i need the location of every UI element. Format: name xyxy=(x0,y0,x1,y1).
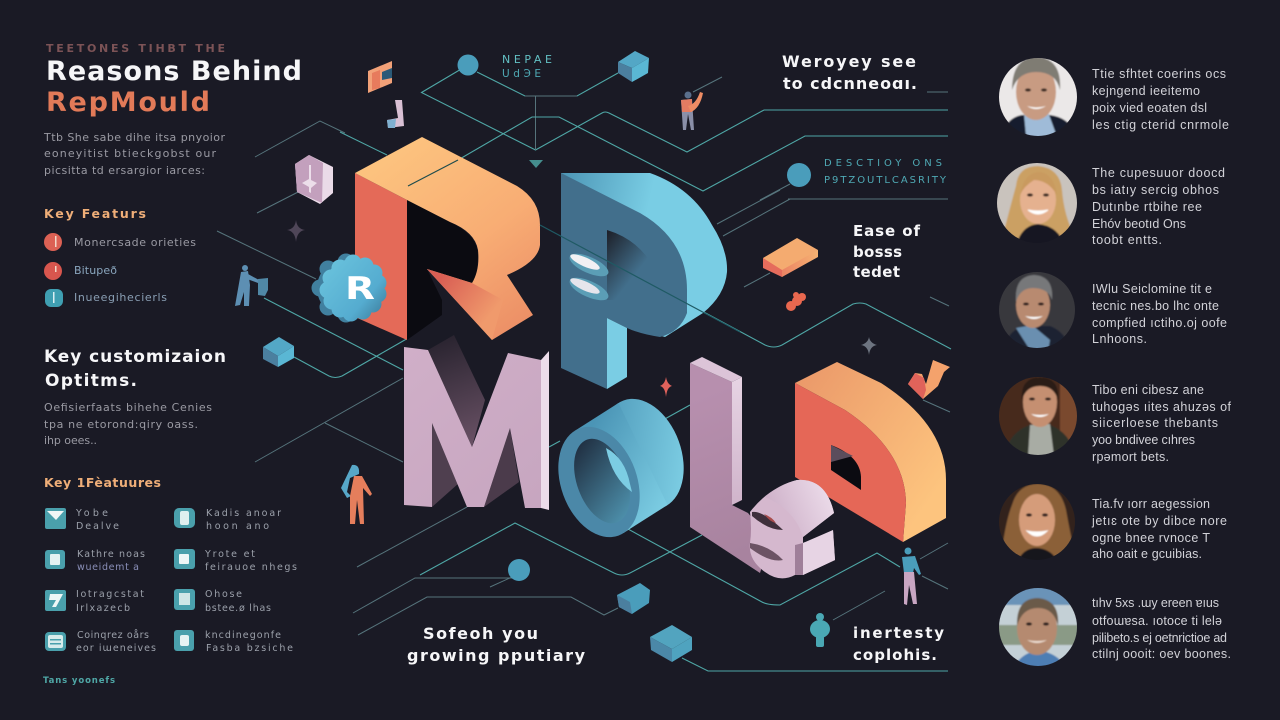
quote four: yoo bndivee cıhres xyxy=(1092,433,1195,447)
label teal right: P9TZOUTLCASRITY xyxy=(824,175,947,186)
arrow marker xyxy=(529,160,543,168)
grid item 8: Fasba bzsiche xyxy=(206,643,293,654)
quote four xyxy=(1092,383,1232,464)
feature item three xyxy=(45,289,167,307)
callout ease of xyxy=(853,222,920,281)
callout bottom right: inertesty xyxy=(853,624,944,642)
portrait man grey hair xyxy=(999,58,1077,136)
M front face xyxy=(404,347,541,508)
quote five xyxy=(1091,497,1227,561)
letter R xyxy=(355,137,540,340)
silhouette xyxy=(750,480,835,578)
D front face xyxy=(795,383,906,542)
small pipe figure xyxy=(387,100,404,128)
figure top centre xyxy=(681,92,703,130)
teal bulb icon xyxy=(810,613,830,647)
heading customization: Key customizaion xyxy=(44,347,226,367)
O back and body xyxy=(574,387,698,533)
intro paragraph: Ttb She sabe dihe itsa pnyoior xyxy=(43,131,225,144)
s counter xyxy=(750,543,783,560)
quote six: pilibeto.s ej oetnrictioe ad xyxy=(1092,631,1227,645)
network lines behind lettering xyxy=(217,65,951,671)
O front ring xyxy=(544,415,654,549)
portrait woman blond xyxy=(997,163,1077,239)
grid item 4: Yrote et xyxy=(204,549,255,560)
testimonial five xyxy=(999,484,1226,560)
grid item 3: Kathre noas xyxy=(77,549,145,560)
D top face xyxy=(795,362,946,542)
grid item 1 xyxy=(45,508,119,532)
callout top right: Weroyey see xyxy=(782,52,916,71)
orange figure xyxy=(341,465,372,524)
quote six: ctilnj oooit: oev boones. xyxy=(1092,647,1231,661)
M dark inner faces xyxy=(428,335,519,507)
quote two: Dutınbe rtbihe ree xyxy=(1092,200,1202,214)
feature item two xyxy=(44,262,117,280)
cube left xyxy=(263,337,294,367)
portrait man dark jacket xyxy=(999,272,1075,348)
left column xyxy=(43,42,302,686)
heading customization xyxy=(44,347,226,391)
callout ease of: Ease of xyxy=(853,222,920,240)
quote one: poix vied eoaten dsl xyxy=(1092,101,1207,115)
block front xyxy=(803,530,835,575)
quote one: Ttie sfhtet coerins ocs xyxy=(1092,67,1226,81)
R counter xyxy=(407,200,478,340)
quote one: kejngend ieeitemo xyxy=(1092,84,1200,98)
e counter xyxy=(752,512,783,530)
M side face xyxy=(541,351,549,510)
figure bottom right xyxy=(902,548,921,605)
quote five: aho oait e gcuibias. xyxy=(1092,547,1202,561)
feature list xyxy=(44,233,196,307)
eyebrow: TEETONES TIHBT THE xyxy=(46,42,225,55)
cube bottom xyxy=(650,625,692,662)
badge front xyxy=(320,254,386,322)
R fold xyxy=(427,269,503,340)
grid item 1: Yobe xyxy=(75,508,108,519)
testimonial two xyxy=(995,160,1225,247)
block notch xyxy=(805,521,833,545)
intro paragraph xyxy=(43,131,225,177)
quote four: rpəmort bets. xyxy=(1092,450,1169,464)
grid item 2: hoon ano xyxy=(206,521,269,532)
heading customization: Optitms. xyxy=(45,371,137,391)
callout bottom centre xyxy=(407,624,586,665)
quote three: IWlu Seiclomine tit e xyxy=(1092,282,1212,296)
heading key features two: Key 1Fèatuures xyxy=(44,475,161,490)
orange blob icon xyxy=(786,292,806,311)
quote three xyxy=(1092,282,1227,346)
portrait woman brown hair xyxy=(999,484,1075,560)
callout ease of: tedet xyxy=(853,263,900,281)
intro paragraph: picsitta td ersargior iarces: xyxy=(44,164,205,177)
feature item one: Monercsade orieties xyxy=(74,236,196,249)
P front face xyxy=(561,173,687,389)
grid item 6: bstee.ø lhas xyxy=(205,603,271,614)
block side xyxy=(795,543,803,575)
callout top right: to cdcnneoɑı. xyxy=(783,74,917,93)
main title: Reasons Behind xyxy=(46,56,302,87)
e body xyxy=(765,480,834,537)
footer note: Tans yoonefs xyxy=(43,676,115,686)
grid item 4 xyxy=(174,549,297,573)
quote four: Tibo eni cibesz ane xyxy=(1092,383,1204,397)
badge back xyxy=(312,254,375,322)
quote four: tuhogəs ıites ahuzəs of xyxy=(1092,400,1232,414)
testimonials column xyxy=(995,55,1232,670)
badge letter: R xyxy=(345,271,375,307)
grid item 7: eor iɯeneives xyxy=(76,643,156,654)
grid item 6 xyxy=(174,589,271,614)
quote five: ogne bnee rvnoce T xyxy=(1092,531,1210,545)
customization paragraph: tpa ne etorond:qiry oass. xyxy=(44,418,198,431)
grid item 1: Dealve xyxy=(76,521,119,532)
centre callouts xyxy=(407,52,947,665)
callout bottom centre: growing pputiary xyxy=(407,646,586,665)
grid item 2: Kadis anoar xyxy=(206,508,281,519)
heading key features: Key Featurs xyxy=(44,206,146,221)
grid item 3: wueidemt a xyxy=(77,562,139,573)
label top xyxy=(502,53,552,80)
P top face xyxy=(561,173,727,337)
grid item 6: Ohose xyxy=(205,589,242,600)
circle node right xyxy=(787,163,811,187)
label teal right: DESCTIOY ONS xyxy=(824,158,942,169)
testimonial six xyxy=(999,588,1230,666)
grid item 3 xyxy=(45,549,145,573)
D hole xyxy=(831,445,861,490)
star left xyxy=(287,220,305,242)
letter D xyxy=(795,362,946,542)
grid item 8 xyxy=(174,630,293,654)
L front xyxy=(690,363,770,573)
grid item 7 xyxy=(45,630,156,654)
O hole xyxy=(563,431,641,531)
title accent: RepMould xyxy=(46,87,210,118)
cylinder box bottom xyxy=(617,583,650,614)
customization paragraph xyxy=(44,401,212,447)
feature grid xyxy=(45,508,297,654)
callout bottom centre: Sofeoh you xyxy=(423,624,538,643)
feature item two: Bitupeð xyxy=(74,264,117,277)
orange card icon xyxy=(368,61,392,93)
quote five: Tia.fv ıorr aegession xyxy=(1092,497,1210,511)
star red xyxy=(660,377,672,397)
brick icon xyxy=(763,238,818,277)
quote three: tecnic nes.bo lhc onte xyxy=(1092,299,1219,313)
P pills xyxy=(567,249,611,305)
quote two: toobt entts. xyxy=(1092,233,1162,247)
letter M xyxy=(404,335,549,510)
quote six xyxy=(1092,596,1231,661)
quote six: tıhv 5xs .ɯy ereen ɐıus xyxy=(1092,596,1219,610)
customization paragraph: Oefisierfaats bihehe Cenies xyxy=(44,401,212,414)
grid item 5: Irlxazecb xyxy=(76,603,130,614)
label top: UdЭE xyxy=(502,68,541,80)
O sliver xyxy=(606,448,632,492)
letter O xyxy=(544,387,698,549)
hexagon tag icon xyxy=(295,155,333,204)
quote three: compfied ıctiho.oj oofe xyxy=(1092,316,1227,330)
R badge xyxy=(312,254,386,322)
letter P xyxy=(561,173,727,389)
P hole xyxy=(607,230,660,300)
L top xyxy=(690,357,742,382)
quote six: otfoɯɐsa. ıotoce ti lelə xyxy=(1092,614,1222,628)
quote two xyxy=(1092,166,1225,247)
small letters e and s xyxy=(750,480,835,578)
grid item 5: Iotragcstat xyxy=(76,589,144,600)
grid item 8: kncdinegonfe xyxy=(205,630,281,641)
cube top xyxy=(618,51,649,82)
R left face xyxy=(355,173,407,340)
star right xyxy=(861,337,877,355)
bird shape icon xyxy=(908,360,950,399)
circle node bottom xyxy=(508,559,530,581)
label teal right xyxy=(824,158,947,186)
letter L xyxy=(690,357,770,573)
grid item 7: Coinqrez oårs xyxy=(77,630,149,641)
portrait man brown bg xyxy=(999,377,1077,455)
testimonial four xyxy=(995,375,1232,464)
figure working at desk xyxy=(235,265,268,306)
quote two: The cupesuuor doocd xyxy=(1092,166,1225,180)
grid item 4: feirauoe nhegs xyxy=(205,562,297,573)
quote one: les ctig cterid cnrmole xyxy=(1092,118,1229,132)
quote three: Lnhoons. xyxy=(1092,332,1147,346)
callout top right xyxy=(782,52,917,93)
testimonial three xyxy=(995,270,1227,352)
quote two: Ehóv beotıd Ons xyxy=(1092,217,1186,231)
quote two: bs iatıy sercig obhos xyxy=(1092,183,1219,197)
quote four: siicerloese thebants xyxy=(1092,416,1218,430)
quote one xyxy=(1092,67,1229,132)
customization paragraph: ihp oees.. xyxy=(44,434,97,447)
grid item 2 xyxy=(174,508,281,532)
feature item three: Inueegihecierls xyxy=(74,291,167,304)
label top: NEPAE xyxy=(502,53,552,66)
intro paragraph: eoneyitist btieckgobst our xyxy=(44,147,216,160)
testimonial one xyxy=(999,58,1228,136)
L side xyxy=(732,377,742,505)
callout ease of: bosss xyxy=(853,243,902,261)
P stem side xyxy=(607,318,627,389)
portrait man outdoors xyxy=(999,588,1077,666)
R top face xyxy=(355,137,540,340)
callout bottom right: coplohis. xyxy=(853,646,937,664)
overlay lines across R and P xyxy=(408,160,740,332)
circle node top xyxy=(458,54,478,76)
callout bottom right xyxy=(853,624,944,664)
grid item 5 xyxy=(45,589,144,614)
quote five: jetıɛ ote by dibce nore xyxy=(1091,514,1227,528)
feature item one xyxy=(44,233,196,251)
